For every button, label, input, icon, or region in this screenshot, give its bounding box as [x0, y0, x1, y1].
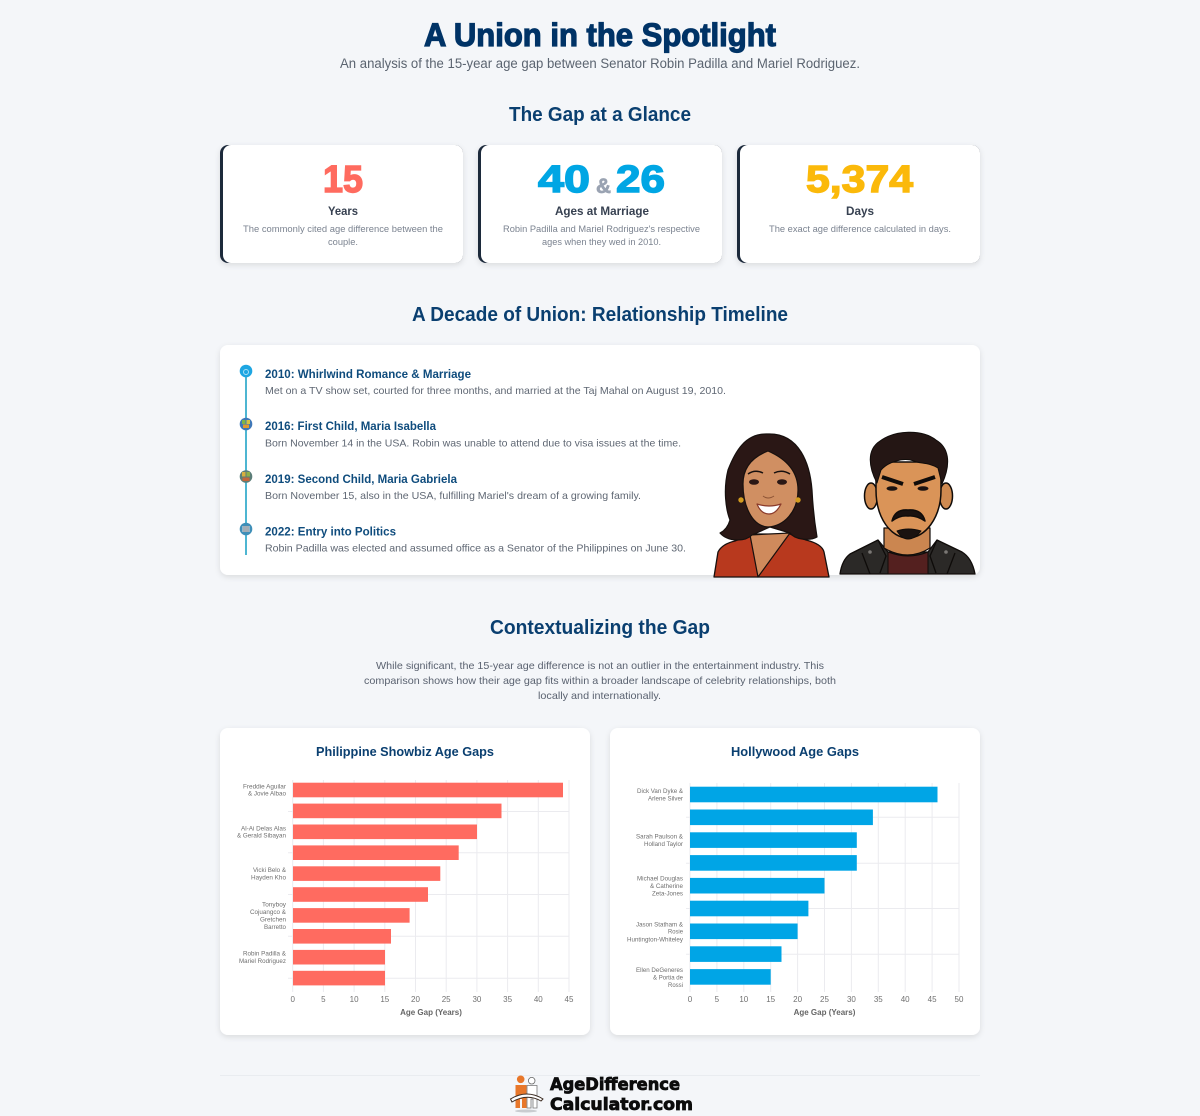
panel: Hollywood chart [610, 728, 980, 1035]
icon: baby 2016 [240, 418, 252, 430]
stat numbers: 40 and 26: & [596, 175, 611, 198]
intro paragraph: While significant, the 15-year age difference is not an outlier in the entertainment industry. This [376, 660, 824, 672]
bar chart: Hollywood: Sarah Paulson & [636, 834, 684, 840]
panel: ages at marriage [478, 145, 722, 263]
bar chart: Hollywood: & Catherine [650, 883, 683, 890]
axis title: Age Gap (Years) [400, 1008, 462, 1017]
bar chart: Hollywood: Dick Van Dyke & [637, 788, 684, 795]
stat label: ages at marriage: Ages at Marriage [555, 204, 649, 218]
event 2022 [265, 524, 686, 554]
event 2019 [265, 472, 641, 502]
logo wordmark: AgeDifference [550, 1075, 680, 1095]
panel: 5,374 days [737, 145, 980, 263]
panel: 15 years [220, 145, 463, 263]
stat description: The exact age difference calculated in days. [769, 224, 951, 235]
bar chart: Hollywood: & Portia de [653, 974, 683, 982]
illustration: Robin Padilla [840, 432, 975, 574]
stat numbers: 40 and 26: 26 [616, 159, 665, 201]
bar chart: Hollywood: Ellen DeGeneres [636, 967, 684, 974]
bar chart: Philippine showbiz: & Jovie Albao [248, 790, 286, 798]
stat description [503, 224, 700, 248]
icon: age difference couple [510, 1076, 543, 1112]
bar chart: Philippine showbiz: Barretto [264, 924, 286, 931]
bar chart: Hollywood: 5 [715, 995, 720, 1004]
bar chart: Hollywood: 10 [739, 995, 749, 1004]
bar chart: Hollywood: Jason Statham & [636, 922, 684, 928]
intro paragraph [364, 660, 836, 702]
bar chart: Philippine showbiz: Robin Padilla & [243, 950, 287, 958]
bar chart: Philippine showbiz: 15 [380, 995, 390, 1004]
stat label: years: Years [328, 204, 358, 218]
stat number: 5,374: 5,374 [806, 159, 913, 201]
illustration: Mariel Rodriguez [714, 434, 829, 577]
bar chart: Hollywood: 30 [847, 995, 856, 1004]
bar chart: Philippine showbiz: 45 [565, 995, 574, 1004]
bar chart: Hollywood: 45 [928, 995, 937, 1004]
footer logo [510, 1075, 693, 1115]
bar chart: Philippine showbiz: 30 [472, 995, 482, 1004]
intro paragraph: comparison shows how their age gap fits within a broader landscape of celebrity relationships, both [364, 675, 836, 687]
icon: baby 2019 [240, 470, 252, 483]
event 2022: Robin Padilla was elected and assumed office as a Senator of the Philippines on June 30. [265, 542, 686, 554]
stat numbers: 40 and 26: 40 [538, 159, 590, 201]
bar chart: Philippine showbiz: 35 [503, 995, 513, 1004]
subtitle: An analysis of the 15-year age gap between Senator Robin Padilla and Mariel Rodriguez. [340, 56, 860, 71]
stat description [243, 224, 443, 248]
bar chart: Hollywood: Zeta-Jones [652, 890, 684, 898]
event 2019: 2019: Second Child, Maria Gabriela [265, 472, 457, 486]
stat description: ages when they wed in 2010. [542, 237, 661, 248]
event 2010: Met on a TV show set, courted for three months, and married at the Taj Mahal on August 19, 2010. [265, 385, 726, 397]
stat description: The commonly cited age difference between the [243, 224, 443, 235]
bar chart: Philippine showbiz: 0 [290, 995, 295, 1004]
bar chart: Philippine showbiz: 20 [411, 995, 420, 1004]
heading: relationship timeline: A Decade of Union: Relationship Timeline [412, 304, 788, 326]
bar chart: Hollywood [627, 783, 964, 1017]
panel: timeline [220, 345, 980, 577]
heading: contextualizing the gap: Contextualizing the Gap [490, 617, 710, 639]
bar chart: Hollywood: 15 [766, 995, 776, 1004]
bar chart: Hollywood: Rossi [668, 982, 683, 989]
icon: government building [240, 523, 252, 535]
bar chart: Hollywood: 25 [820, 995, 829, 1004]
event 2022: 2022: Entry into Politics [265, 524, 396, 538]
bar chart: Hollywood: 20 [793, 995, 803, 1004]
bar chart: Philippine showbiz: Mariel Rodriguez [239, 958, 286, 965]
event 2016: 2016: First Child, Maria Isabella [265, 419, 436, 433]
event 2016 [265, 419, 681, 450]
bar chart: Philippine showbiz: Tonyboy [262, 902, 287, 908]
bar chart: Hollywood: Arlene Silver [648, 796, 684, 802]
bar chart: Philippine showbiz: 10 [350, 995, 359, 1004]
bar chart: Philippine showbiz: 25 [442, 995, 451, 1004]
logo wordmark: Calculator.com [550, 1095, 693, 1115]
stat label: days: Days [846, 204, 874, 218]
event 2019: Born November 15, also in the USA, fulfilling Mariel's dream of a growing family. [265, 490, 641, 502]
heading: the gap at a glance: The Gap at a Glance [509, 104, 691, 126]
logo wordmark [550, 1075, 693, 1115]
bar chart: Hollywood: 50 [955, 995, 964, 1004]
stat description: Robin Padilla and Mariel Rodriguez's respective [503, 224, 700, 235]
bar chart: Hollywood: Holland Taylor [644, 841, 684, 848]
axis title: Age Gap (Years) [794, 1008, 856, 1017]
chart title: Hollywood Age Gaps [731, 745, 859, 759]
bar chart: Hollywood: 35 [874, 995, 883, 1004]
timeline line [245, 371, 247, 555]
bar chart: Philippine showbiz: 5 [321, 995, 326, 1004]
bar chart: Hollywood: Michael Douglas [637, 876, 684, 882]
bar chart: Philippine showbiz: Cojuangco & [250, 909, 287, 916]
bar chart: Philippine showbiz: Gretchen [260, 916, 286, 924]
event 2010: 2010: Whirlwind Romance & Marriage [265, 367, 471, 381]
bar chart: Philippine showbiz: Vicki Belo & [253, 867, 287, 874]
stat number: 15: 15 [323, 159, 363, 201]
event 2016: Born November 14 in the USA. Robin was unable to attend due to visa issues at the time. [265, 438, 681, 450]
bar chart: Philippine showbiz: 40 [534, 995, 543, 1004]
title: A Union in the Spotlight [424, 17, 776, 53]
chart title: Philippine Showbiz Age Gaps [316, 745, 494, 759]
intro paragraph: locally and internationally. [538, 690, 661, 702]
stat numbers: 40 and 26 [538, 159, 665, 201]
panel: Philippine showbiz chart [220, 728, 590, 1035]
bar chart: Philippine showbiz: Freddie Aguilar [243, 784, 287, 790]
bar chart: Philippine showbiz: Al-Ai Delas Alas [241, 826, 287, 832]
bar chart: Philippine showbiz [237, 780, 574, 1017]
bar chart: Hollywood: Huntington-Whiteley [627, 936, 684, 944]
bar chart: Philippine showbiz: & Gerald Sibayan [237, 832, 286, 840]
bar chart: Philippine showbiz: Hayden Kho [251, 874, 286, 882]
bar chart: Hollywood: Rosie [668, 928, 683, 936]
bar chart: Hollywood: 40 [901, 995, 910, 1004]
stat description: couple. [328, 237, 358, 248]
event 2010 [265, 367, 726, 397]
bar chart: Hollywood: 0 [688, 995, 693, 1004]
icon: ring [240, 365, 252, 377]
